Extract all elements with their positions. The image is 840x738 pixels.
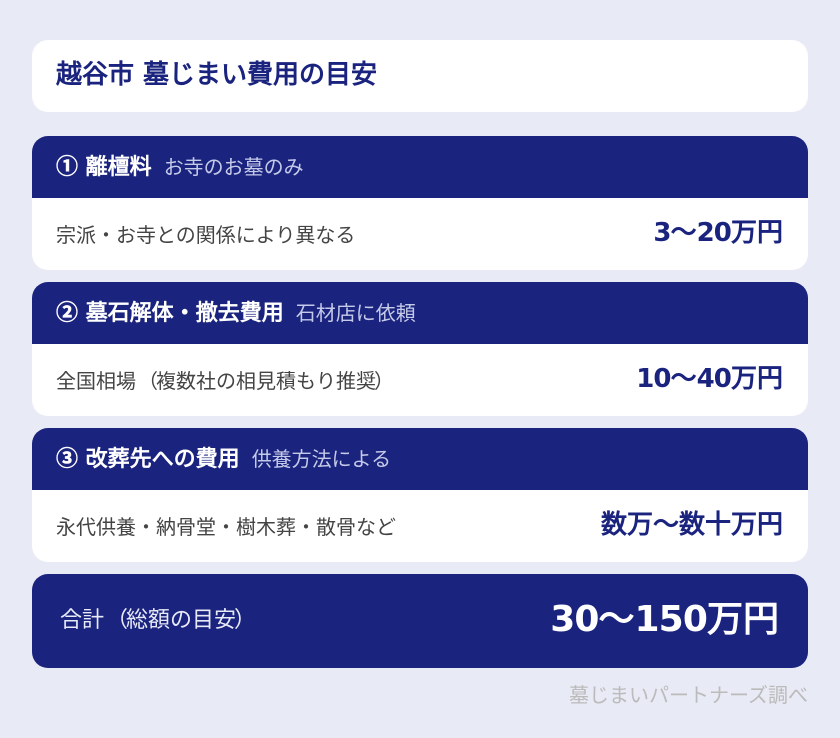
panel: item 1: ① 離檀料 お寺のお墓のみ	[56, 149, 304, 181]
title panel: 越谷市 墓じまい費用の目安	[56, 60, 377, 90]
panel: item 3: ③ 改葬先への費用 供養方法による	[56, 441, 391, 473]
panel: item 3: 永代供養・納骨堂・樹木葬・散骨など	[56, 510, 396, 540]
panel: item 3	[32, 428, 808, 562]
panel: item 2: 全国相場（複数社の相見積もり推奨）	[56, 364, 394, 394]
title panel	[32, 40, 808, 112]
panel: item 2: 10～40万円	[636, 364, 783, 394]
source note: 墓じまいパートナーズ調べ	[569, 683, 808, 707]
panel: item 1: 3～20万円	[653, 218, 783, 248]
panel: item 2	[32, 282, 808, 416]
panel: total	[32, 574, 808, 668]
panel: total: 合計（総額の目安）	[60, 602, 256, 634]
panel: item 1	[32, 136, 808, 270]
panel: item 1: 宗派・お寺との関係により異なる	[56, 218, 355, 248]
panel: item 3: 数万～数十万円	[601, 510, 783, 540]
panel: total: 30～150万円	[550, 599, 779, 640]
panel: item 2: ② 墓石解体・撤去費用 石材店に依頼	[56, 295, 416, 327]
